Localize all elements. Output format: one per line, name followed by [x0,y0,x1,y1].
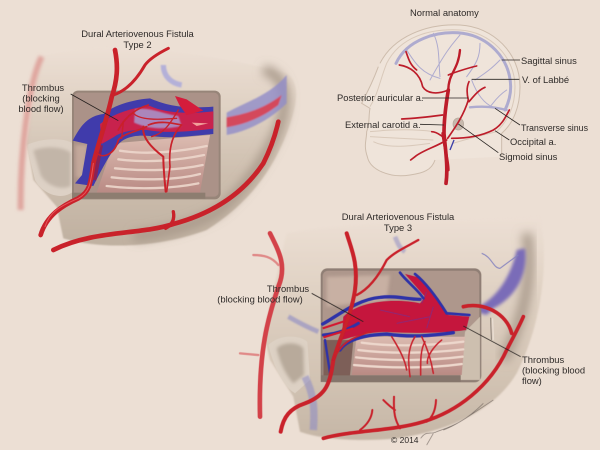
leader lines [420,60,520,153]
skull edge shading [503,233,529,360]
label: posterior auricular artery: Posterior auricular a. [337,92,424,103]
neck artery left [240,233,282,417]
label: sigmoid sinus: Sigmoid sinus [499,151,558,162]
distal sinus [470,248,526,340]
bottom cut edge [72,193,205,199]
arteries [281,233,523,438]
panel: type 2 fistula illustration [21,48,296,250]
veins and sinuses [396,33,511,110]
label: external carotid artery: External carotid a. [345,119,421,130]
label: thrombus left, type 3: (blocking blood flow) [217,294,303,304]
label: thrombus, type 2: blood flow) [18,103,64,114]
title: normal anatomy: Normal anatomy [410,7,479,18]
title: type 2: Type 2 [123,39,152,50]
panel: type 3 fistula illustration [240,217,544,445]
ear [453,118,464,130]
window into the cranium [321,268,481,382]
distal sinus beyond the window [227,75,287,135]
arteries [399,50,509,183]
thrombus leader line [71,94,118,121]
label: occipital artery: Occipital a. [510,136,556,147]
thrombus leader lines [312,293,521,357]
label: thrombus left, type 3: Thrombus [267,283,309,294]
label: transverse sinus: Transverse sinus [521,122,588,133]
blue vein fragments [288,237,405,430]
label: thrombus right, type 3: Thrombus [522,354,564,365]
label: thrombus, type 2: Thrombus [22,82,64,93]
brain folds [97,135,210,193]
arteries [41,48,278,250]
window into the cranium [72,91,221,199]
dilated sinus [323,273,469,373]
head outline [362,25,520,176]
panel: normal anatomy [362,25,520,183]
signature [421,400,493,445]
title: type 2: Dural Arteriovenous Fistula [81,28,194,39]
jugular vein [450,140,454,150]
skull bone [263,217,544,440]
label: sagittal sinus: Sagittal sinus [521,55,577,66]
label: vein of Labbé: V. of Labbé [522,74,569,85]
title: type 3: Dural Arteriovenous Fistula [342,211,454,222]
head silhouette fill [362,25,520,176]
brain folds [352,337,465,375]
label: thrombus right, type 3: (blocking blood [522,364,585,376]
upper vein fragment [163,65,182,85]
skull bone [27,48,296,246]
copyright: © 2014 [391,435,419,445]
neck vessel, faint [21,57,42,210]
skull edge shading [133,70,285,237]
title: type 3: Type 3 [384,222,412,233]
transverse sinus [73,96,213,186]
label: thrombus, type 2: (blocking [22,92,60,104]
eye socket [268,336,310,393]
skull outline [370,30,515,146]
eye socket [27,139,75,196]
label: thrombus right, type 3: flow) [522,375,542,386]
